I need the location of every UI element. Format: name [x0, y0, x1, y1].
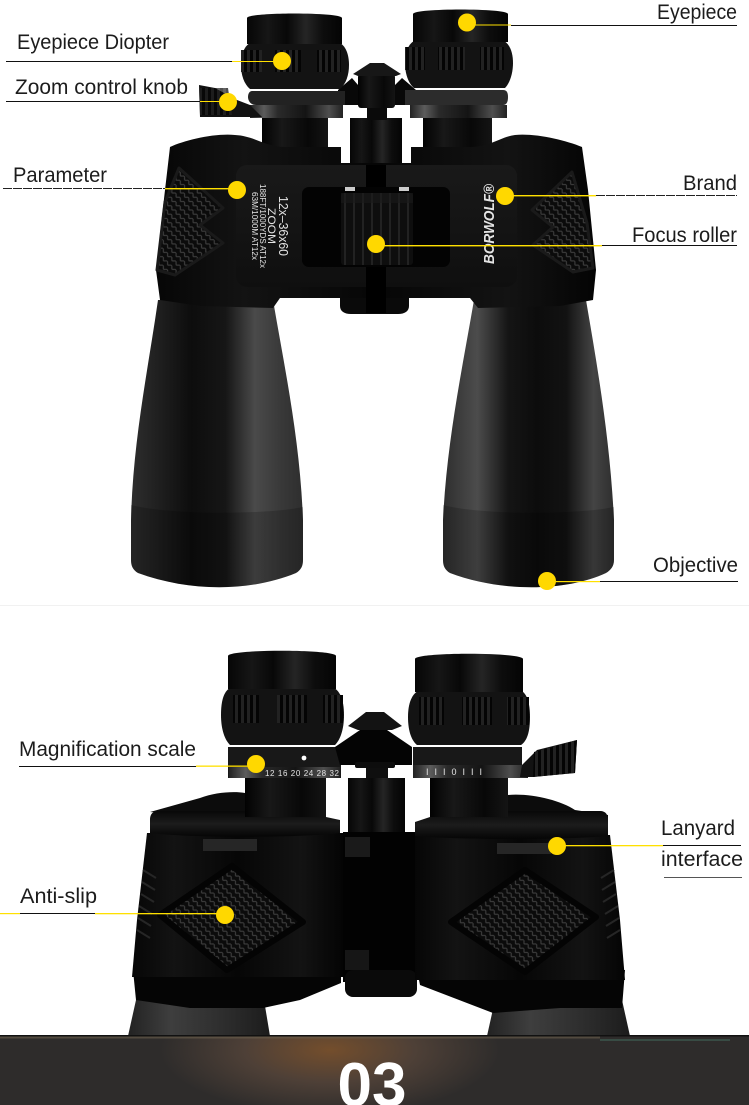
left tube: [262, 115, 328, 151]
bridge: [335, 730, 412, 765]
left knurl clusters: [233, 695, 343, 723]
callout: Anti-slip: Anti-slip: [20, 885, 97, 908]
right lower barrel: [487, 1000, 630, 1036]
banner: [0, 1035, 749, 1105]
callout: Eyepiece Diopter: Eyepiece Diopter: [17, 31, 169, 54]
bottom binoculars: rear view: [128, 651, 630, 1036]
callout: Focus roller: [367, 224, 737, 253]
centre cap: [353, 63, 401, 76]
left knurl clusters: [241, 50, 341, 72]
right grip pattern: [532, 172, 593, 272]
left lower collar: [250, 105, 343, 118]
callout: Focus roller: Focus roller: [632, 224, 737, 247]
central column: [350, 108, 402, 170]
left lanyard slot: [203, 839, 257, 851]
right lanyard slot: [497, 843, 551, 854]
lever ridges: [533, 740, 577, 777]
right zoom collar: [405, 90, 508, 105]
left objective barrel: [131, 300, 303, 587]
callout: Magnification scale: Magnification scale: [19, 738, 196, 761]
callout: Lanyard interface: [548, 817, 743, 878]
zoom lever: [520, 740, 577, 777]
focus foot: [340, 295, 409, 314]
left eyepiece cup: [228, 651, 336, 689]
right eyepiece cup: [413, 10, 508, 42]
right rear wing: [508, 795, 608, 820]
callout: Eyepiece: Eyepiece: [657, 1, 737, 24]
centre post: [358, 74, 395, 108]
left chevrons: [137, 870, 156, 938]
parameter text: 63M/1000M AT12x: [250, 192, 259, 260]
left rear wing: [150, 792, 245, 817]
left grip pattern: [157, 168, 223, 275]
callout: Anti-slip: [0, 885, 234, 924]
right zoom collar: [413, 747, 522, 765]
left zoom collar: [228, 747, 341, 778]
left tube: [245, 775, 326, 820]
right tube: [423, 115, 492, 151]
bridge arms: [338, 78, 416, 105]
left eyepiece ring: [221, 687, 344, 745]
right tube: [430, 775, 508, 820]
left lower rim: [133, 970, 341, 1008]
callout: Objective: Objective: [653, 554, 738, 577]
callout: Eyepiece: [458, 1, 737, 32]
right eyepiece ring: [405, 40, 513, 88]
right chevrons: [601, 870, 620, 938]
right lower rim: [417, 970, 625, 1013]
parameter text: 12x–36x60: [276, 196, 291, 256]
parameter text: ZOOM: [265, 208, 277, 244]
magnification numbers: 12 16 20 24 28 32: [265, 769, 340, 778]
left eyepiece cup: [247, 14, 342, 44]
model plate: [236, 165, 517, 287]
callout: Brand: Brand: [683, 172, 737, 195]
faint section divider: [0, 605, 749, 606]
centre post plate: [355, 762, 395, 768]
left grip diamond: [160, 866, 303, 970]
central column: [343, 778, 417, 997]
right grip diamond: [451, 870, 596, 972]
right lower collar: [410, 105, 507, 118]
diopter scale marks: I I I 0 I I I: [426, 767, 482, 777]
centre post neck: [366, 768, 388, 778]
left scale band: [229, 767, 340, 778]
focus roller: [341, 187, 413, 265]
right eyepiece cup: [415, 654, 523, 692]
callout: Lanyard interface: Lanyard: [661, 817, 735, 840]
right eyepiece ring: [408, 690, 530, 745]
right knurl clusters: [405, 47, 504, 70]
left top cap: [150, 811, 340, 837]
parameter text: [250, 184, 291, 268]
left zoom collar: [248, 91, 345, 105]
lever ridges: [199, 88, 232, 115]
plate centre channel: [366, 165, 386, 313]
right scale band: [413, 765, 528, 778]
focus window: [302, 187, 450, 267]
callout: Parameter: Parameter: [13, 164, 107, 187]
top binoculars: front view: [131, 10, 614, 587]
left eyepiece ring: [241, 42, 349, 89]
callout: Parameter: [3, 164, 246, 199]
zoom lever: [199, 85, 262, 117]
left body: [132, 833, 343, 977]
right objective barrel: [443, 300, 614, 587]
callout: Magnification scale: [19, 738, 265, 773]
callout: Brand: [496, 172, 737, 205]
cap: [348, 712, 402, 730]
central body: [156, 135, 596, 308]
scale white dot: [302, 756, 306, 760]
left lower barrel: [128, 1000, 270, 1036]
brand text: BORWOLF®: [481, 183, 498, 264]
callout: Zoom control knob: Zoom control knob: [15, 76, 188, 99]
callout: Objective: [538, 554, 738, 590]
right body: [415, 835, 625, 980]
right knurl clusters: [419, 697, 529, 725]
callout: Lanyard interface: interface: [661, 848, 743, 871]
right top cap: [415, 811, 608, 839]
callout: Eyepiece Diopter: [6, 31, 291, 70]
parameter text: 188FT/1000YDS AT12x: [258, 184, 267, 268]
callout: Zoom control knob: [6, 76, 237, 111]
